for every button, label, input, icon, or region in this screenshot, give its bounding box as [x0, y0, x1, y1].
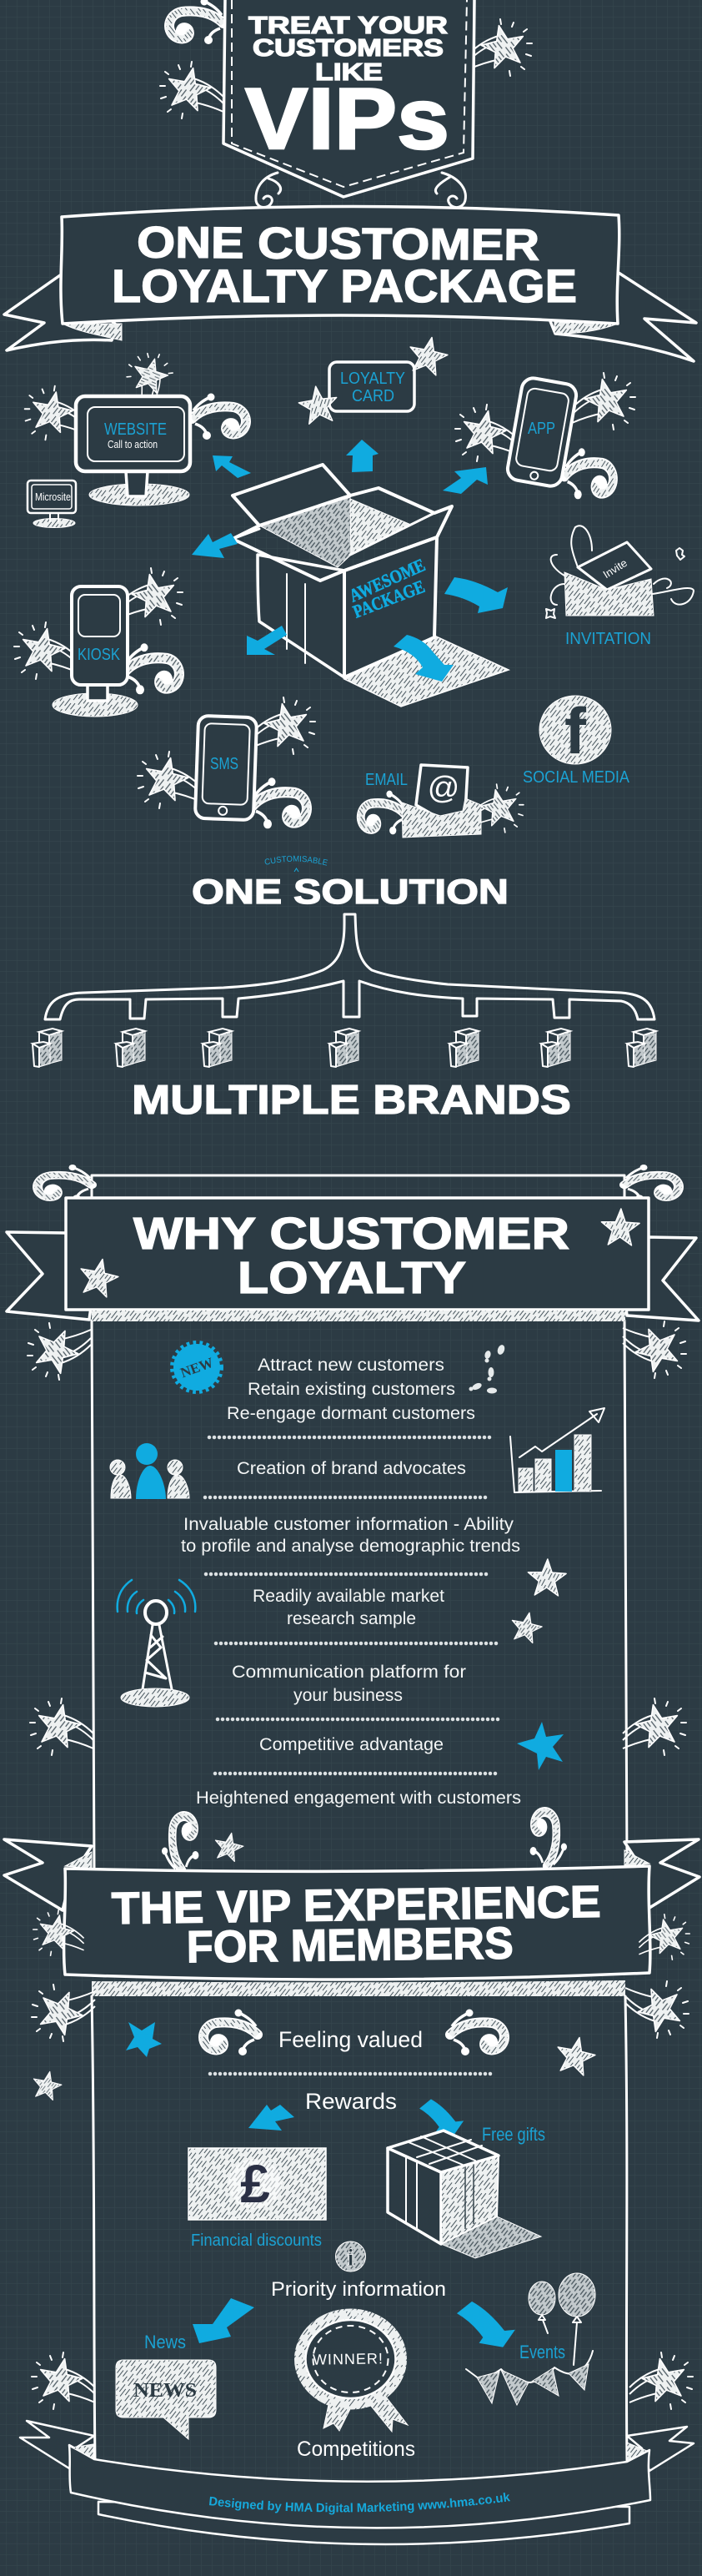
- news speech bubble: [116, 2332, 216, 2439]
- section heading: [111, 1877, 601, 1972]
- benefit: communication platform: Communication platform for: [232, 1663, 466, 1682]
- kiosk: [14, 568, 183, 717]
- icon: information: [335, 2241, 365, 2272]
- sms phone: SMS: [210, 755, 238, 773]
- loyalty card: CARD: [352, 387, 394, 405]
- free gift box: [388, 2124, 545, 2258]
- one solution heading: CUSTOMISABLE: [265, 856, 328, 866]
- benefit: engagement: Heightened engagement with customers: [196, 1789, 521, 1808]
- stars: [33, 2022, 595, 2100]
- invitation: [546, 526, 694, 648]
- section heading: THE VIP EXPERIENCE: [111, 1877, 601, 1934]
- loyalty card: [295, 337, 448, 430]
- icon: footprints: [469, 1344, 506, 1393]
- rewards: Rewards: [305, 2089, 397, 2114]
- icon: new badge: NEW: [178, 1355, 216, 1381]
- icon: people: [110, 1443, 189, 1499]
- back banner with corner scrolls: [38, 1165, 679, 1201]
- icon: radio tower: [118, 1580, 195, 1707]
- social media: [523, 694, 630, 787]
- email: [361, 765, 524, 838]
- app phone: [455, 373, 635, 499]
- website monitor: Call to action: [108, 438, 158, 450]
- multiple brands heading: MULTIPLE BRANDS: [132, 1078, 571, 1123]
- benefit: competitive advantage: Competitive advantage: [259, 1735, 444, 1754]
- section heading: FOR MEMBERS: [186, 1919, 514, 1972]
- icon: stars: [512, 1557, 569, 1643]
- competitions: Competitions: [297, 2438, 415, 2461]
- sms phone: [138, 697, 315, 828]
- banner tails: [4, 1839, 699, 1910]
- footer ribbon: [18, 2419, 695, 2546]
- benefit: customer information: Invaluable customer information - Ability: [183, 1515, 514, 1534]
- email: EMAIL: [365, 771, 408, 789]
- banner front: [64, 1866, 650, 1980]
- box label: [346, 554, 429, 622]
- priority information: Priority information: [271, 2278, 446, 2301]
- ornaments around pennant: [160, 0, 532, 208]
- decorative scrolls above banner: [162, 1812, 567, 1870]
- benefit: customer information: [181, 1515, 520, 1556]
- app phone: APP: [528, 420, 555, 438]
- brand icons row: [33, 1029, 656, 1067]
- title text: VIPs: [245, 71, 449, 168]
- social media: f: [564, 694, 587, 767]
- social media: SOCIAL MEDIA: [523, 768, 630, 787]
- invitation: Invite: [601, 556, 629, 581]
- website monitor: WEBSITE: [104, 420, 167, 439]
- banner tails: [7, 1232, 699, 1321]
- email: @: [428, 771, 459, 806]
- financial discount note: [188, 2148, 326, 2250]
- benefit: brand advocates: Creation of brand advocates: [237, 1459, 466, 1478]
- bar chart: [510, 1408, 604, 1492]
- invitation: INVITATION: [565, 630, 651, 648]
- one solution heading: ONE SOLUTION: [192, 872, 509, 911]
- banner heading: ONE CUSTOMER: [137, 218, 539, 270]
- winner rosette: [298, 2313, 408, 2432]
- title text: LIKE: [315, 59, 383, 86]
- feeling valued: [203, 2009, 504, 2055]
- benefit: market research: research sample: [287, 1609, 416, 1628]
- benefit: customer information: to profile and analyse demographic trends: [181, 1537, 520, 1556]
- box label: AWESOME: [346, 554, 429, 606]
- side comets: [28, 1321, 686, 1755]
- benefit: attract, retain, re-engage: [227, 1356, 475, 1423]
- panel side rails: [92, 1996, 627, 2462]
- benefit: communication platform: [232, 1663, 466, 1705]
- title text: TREAT YOUR: [248, 13, 448, 39]
- benefit: market research: [253, 1587, 444, 1628]
- benefit: communication platform: your business: [293, 1686, 403, 1705]
- benefit: market research: Readily available market: [253, 1587, 444, 1606]
- arrows from priority information: [193, 2298, 519, 2354]
- one solution heading: [192, 856, 509, 911]
- section heading: [133, 1209, 569, 1303]
- free gift box: Free gifts: [482, 2124, 545, 2145]
- icon: blue star: [517, 1722, 564, 1770]
- arrows around package: [192, 440, 508, 682]
- footer credit: Designed by HMA Digital Marketing www.hma.co.uk: [209, 2493, 510, 2514]
- balloons and bunting: [466, 2273, 595, 2405]
- pennant shape: [223, 0, 474, 197]
- icon: information: i: [347, 2244, 354, 2272]
- banner: one customer loyalty package: [4, 206, 696, 361]
- banner stars: [81, 1206, 643, 1297]
- title text: CUSTOMERS: [253, 35, 444, 62]
- banner heading: LOYALTY PACKAGE: [112, 259, 577, 312]
- title text: [245, 13, 449, 168]
- panel: why customer loyalty: [7, 1165, 699, 1870]
- microsite monitor: Microsite: [35, 491, 71, 503]
- feeling valued: Feeling valued: [278, 2027, 423, 2052]
- arrows from rewards: [248, 2096, 467, 2140]
- benefit: attract, retain, re-engage: Retain existing customers: [248, 1380, 455, 1399]
- icon: new badge: [173, 1344, 220, 1391]
- panel side rails: [92, 1321, 627, 1869]
- winner rosette: WINNER!: [313, 2350, 383, 2368]
- header pennant with title: [160, 0, 532, 208]
- side comets: [32, 1981, 693, 2409]
- financial discount note: £: [240, 2154, 270, 2214]
- kiosk: KIOSK: [78, 646, 121, 664]
- news speech bubble: NEWS: [133, 2380, 197, 2402]
- open package box: [233, 465, 509, 707]
- loyalty card: LOYALTY: [340, 370, 405, 388]
- balloons and bunting: Events: [519, 2342, 565, 2362]
- banner heading: [112, 218, 577, 312]
- panel: the vip experience: [4, 1839, 699, 2462]
- benefit: attract, retain, re-engage: Re-engage dormant customers: [227, 1404, 475, 1423]
- box label: PACKAGE: [350, 576, 428, 622]
- banner side comets: [33, 1910, 689, 1960]
- section heading: WHY CUSTOMER: [133, 1209, 569, 1259]
- news speech bubble: News: [144, 2332, 186, 2352]
- banner front: [66, 1198, 649, 1310]
- website monitor: [25, 349, 246, 506]
- section heading: LOYALTY: [238, 1253, 466, 1303]
- microsite monitor: [28, 480, 76, 527]
- benefit: attract, retain, re-engage: Attract new customers: [258, 1356, 444, 1375]
- financial discount note: Financial discounts: [191, 2231, 322, 2250]
- branching tree connector: [45, 914, 654, 1019]
